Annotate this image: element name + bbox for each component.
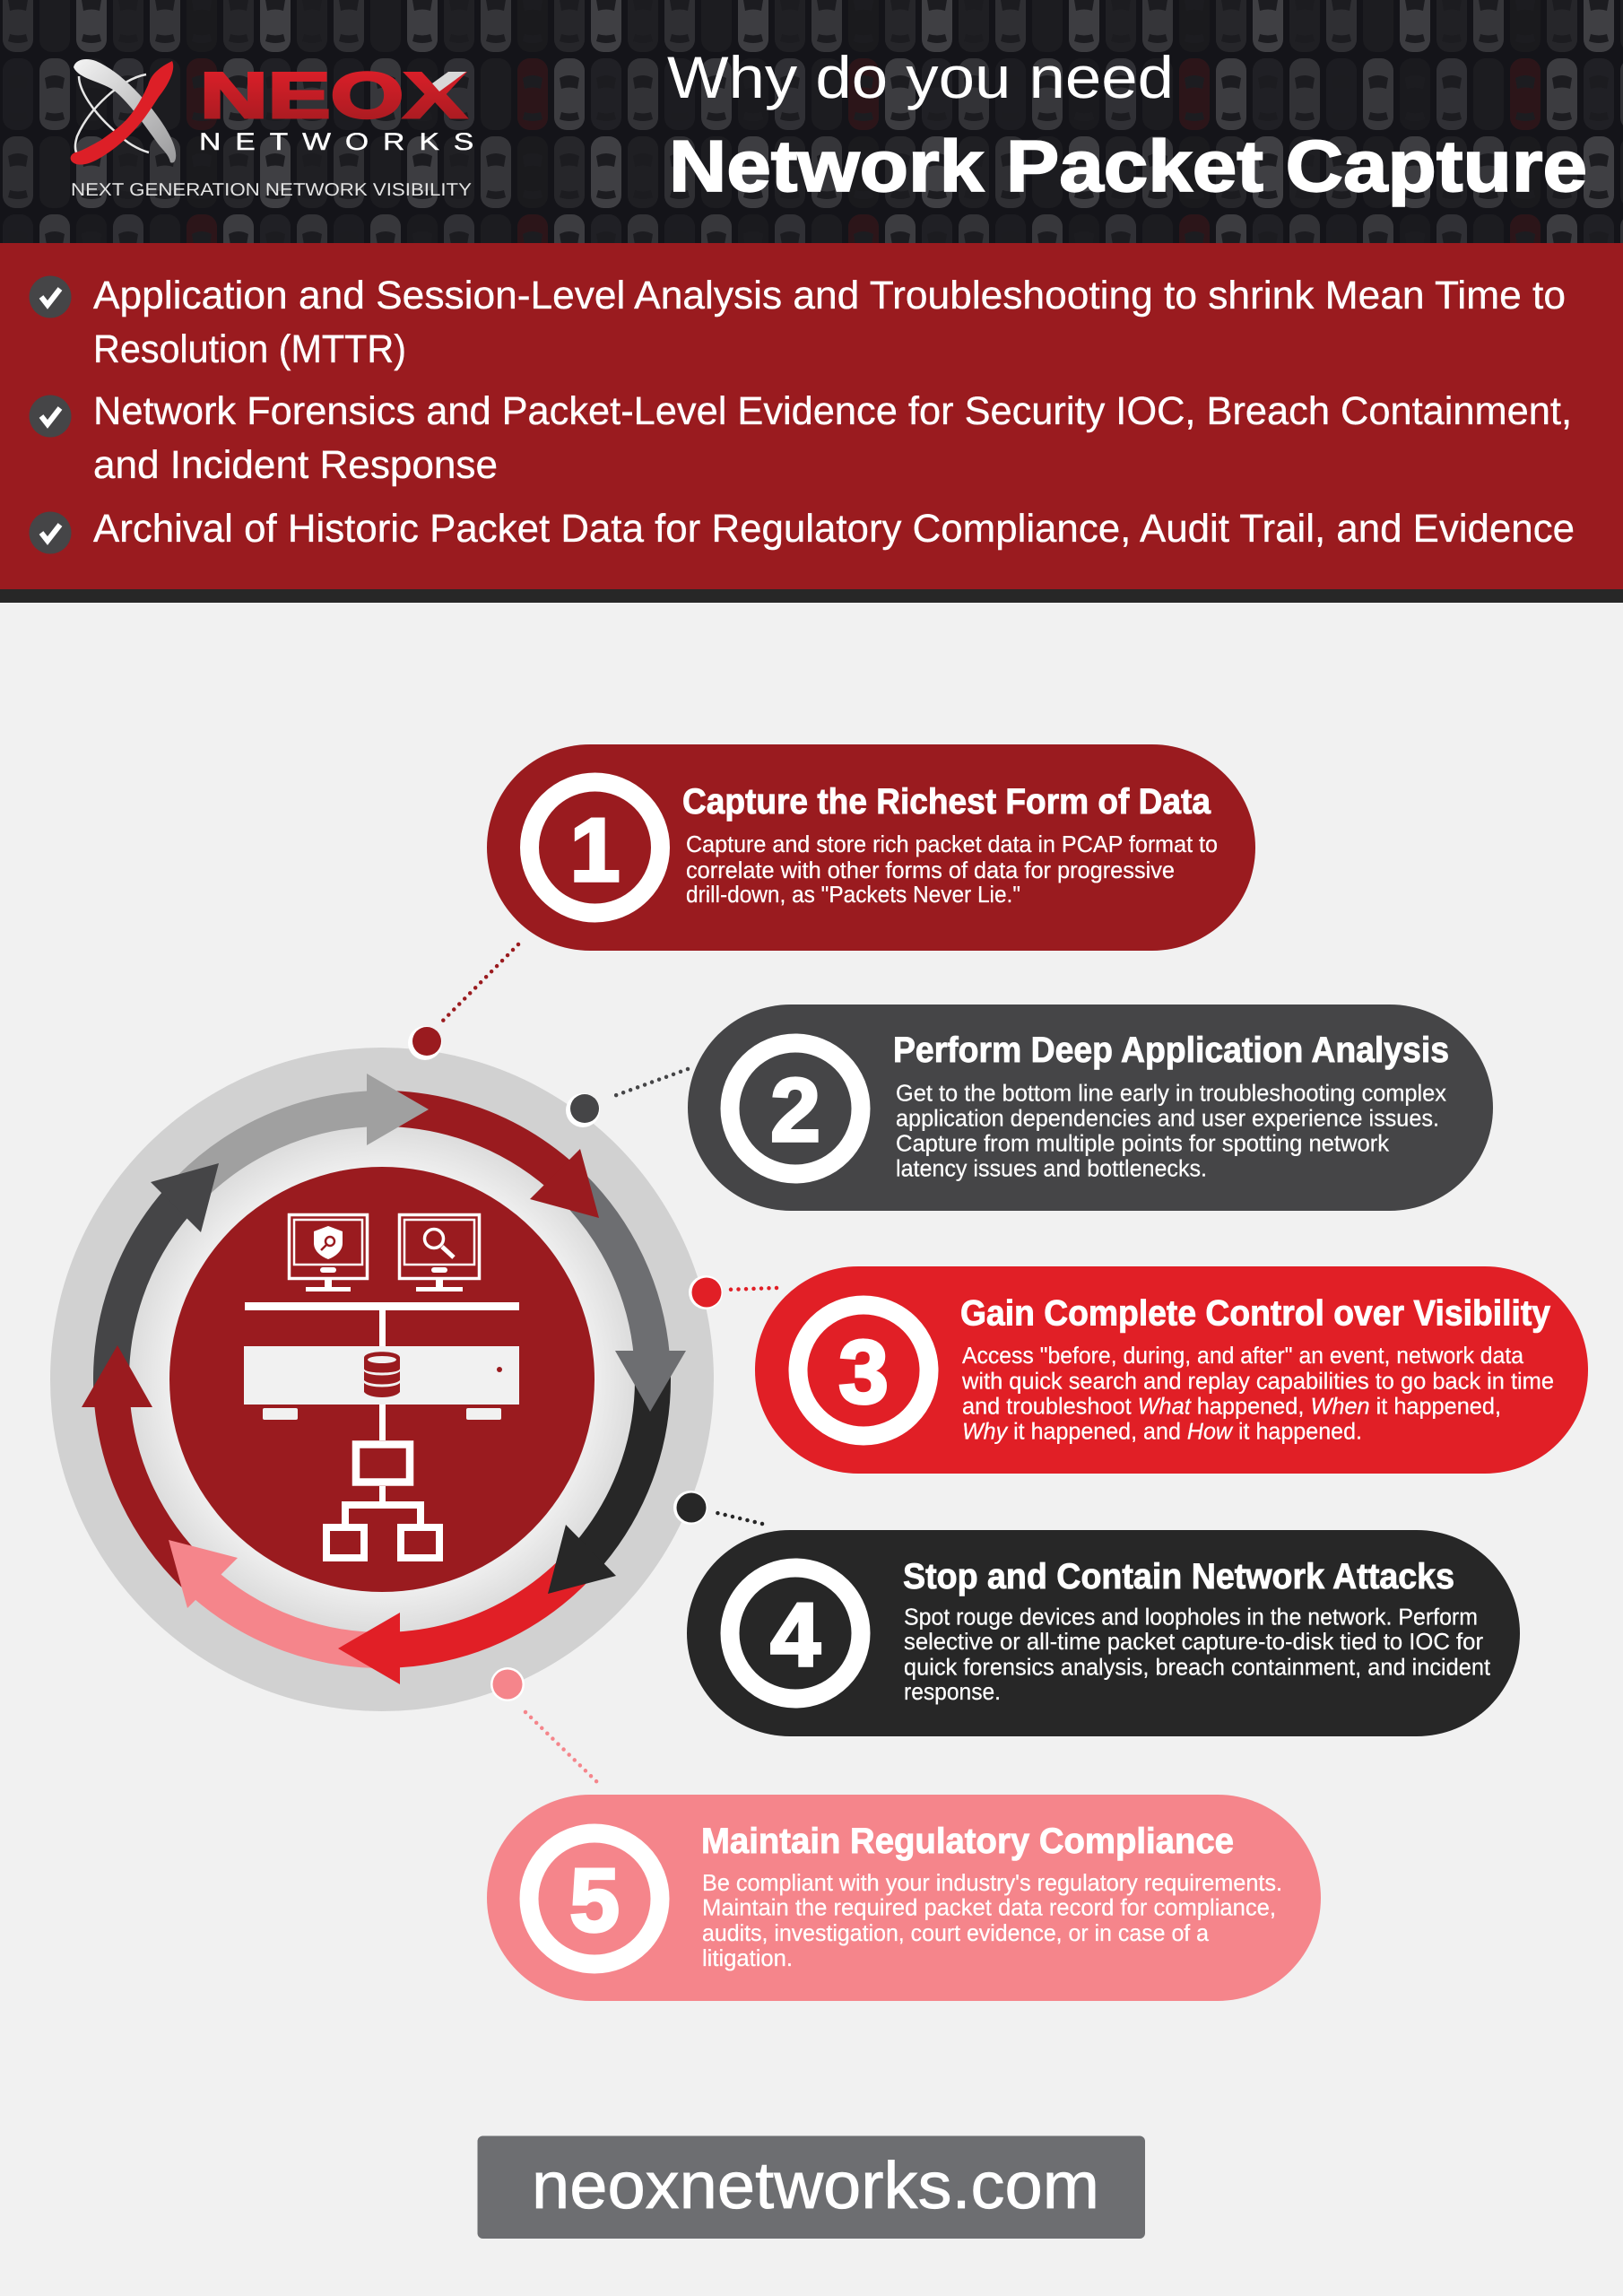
step 5 number badge: 5 bbox=[569, 1850, 620, 1951]
logo word NETWORKS: NETWORKS bbox=[199, 128, 473, 155]
step 2 body: Get to the bottom line early in troubleshooting complex bbox=[896, 1080, 1446, 1107]
bullet 3: Archival of Historic Packet Data for Regulatory Compliance, Audit Trail, and Evidence bbox=[93, 507, 1575, 551]
panel: step 5 bbox=[487, 1795, 1321, 2001]
bullet 1: Application and Session-Level Analysis and Troubleshooting to shrink Mean Time to bbox=[93, 274, 1566, 317]
footer website badge bbox=[477, 2136, 1145, 2239]
title line 2: Network Packet Capture bbox=[669, 126, 1587, 207]
bullet 2: and Incident Response bbox=[93, 443, 498, 487]
header banner bbox=[0, 0, 1623, 243]
connector dots and lines bbox=[408, 944, 777, 1784]
network bus line bbox=[245, 1302, 519, 1440]
step 5 body: Be compliant with your industry's regulatory requirements. bbox=[702, 1869, 1282, 1896]
step 2 number badge: 2 bbox=[770, 1060, 820, 1161]
step 1 body: drill-down, as "Packets Never Lie." bbox=[686, 881, 1020, 908]
bullet 2: Network Forensics and Packet-Level Evidence for Security IOC, Breach Containment, bbox=[93, 389, 1572, 433]
step 1 heading: Capture the Richest Form of Data bbox=[682, 782, 1211, 822]
step 4 heading: Stop and Contain Network Attacks bbox=[903, 1557, 1454, 1596]
step 2 number badge bbox=[730, 1043, 861, 1174]
step 3 body: Why it happened, and How it happened. bbox=[962, 1417, 1362, 1444]
panel: benefits list bbox=[0, 243, 1623, 603]
step 3 number badge bbox=[798, 1305, 929, 1436]
step 1 number badge: 1 bbox=[570, 800, 620, 900]
step 3 number badge: 3 bbox=[838, 1322, 889, 1422]
logo wordmark NEOX: NEOX bbox=[200, 60, 466, 132]
step 2 body: Capture from multiple points for spotting network bbox=[896, 1130, 1390, 1157]
step 4 body: selective or all-time packet capture-to-disk tied to IOC for bbox=[904, 1628, 1483, 1655]
panel: step 2 bbox=[688, 1004, 1493, 1211]
step 3 body bbox=[961, 1342, 1554, 1444]
icon: network hierarchy bbox=[326, 1444, 439, 1558]
icon: monitor with shield bbox=[289, 1214, 368, 1292]
step 5 body: litigation. bbox=[702, 1944, 793, 1971]
logo orbit mark bbox=[71, 59, 176, 165]
step 5 body: audits, investigation, court evidence, or in case of a bbox=[702, 1919, 1210, 1946]
step 4 number badge: 4 bbox=[770, 1585, 820, 1685]
bullet 1 bbox=[29, 274, 1566, 371]
arrow heads bbox=[82, 1074, 686, 1684]
step 2 heading: Perform Deep Application Analysis bbox=[893, 1031, 1449, 1070]
step 4 body: Spot rouge devices and loopholes in the network. Perform bbox=[904, 1604, 1478, 1631]
step 1 number badge bbox=[529, 782, 660, 913]
step 5 heading: Maintain Regulatory Compliance bbox=[701, 1822, 1234, 1861]
panel: step 1 bbox=[487, 744, 1255, 951]
step 5 number badge bbox=[529, 1833, 660, 1964]
logo tagline: NEXT GENERATION NETWORK VISIBILITY bbox=[71, 180, 472, 200]
step 2 body: application dependencies and user experience issues. bbox=[896, 1105, 1439, 1132]
step 1 body: Capture and store rich packet data in PCAP format to bbox=[686, 831, 1218, 857]
step 5 body bbox=[702, 1869, 1282, 1971]
logo bbox=[71, 59, 473, 200]
step 1 body: correlate with other forms of data for progressive bbox=[686, 857, 1175, 883]
arrow bodies bbox=[0, 996, 765, 1762]
step 2 body: latency issues and bottlenecks. bbox=[896, 1155, 1207, 1182]
title line 1: Why do you need bbox=[667, 44, 1174, 110]
step 4 body bbox=[904, 1604, 1491, 1705]
step 2 body bbox=[896, 1080, 1446, 1182]
panel: step 3 bbox=[755, 1266, 1588, 1474]
step 3 body: Access "before, during, and after" an event, network data bbox=[962, 1342, 1524, 1369]
panel: step 4 bbox=[687, 1530, 1520, 1736]
outer ring bbox=[50, 1048, 714, 1711]
capture appliance bbox=[244, 1346, 519, 1420]
footer website badge: neoxnetworks.com bbox=[532, 2148, 1099, 2222]
bullet 2 bbox=[29, 389, 1572, 487]
step 3 body: and troubleshoot What happened, When it happened, bbox=[962, 1392, 1501, 1419]
icon: database bbox=[364, 1352, 400, 1397]
step 1 body bbox=[686, 831, 1218, 908]
step 4 number badge bbox=[730, 1568, 861, 1699]
bullet 1: Resolution (MTTR) bbox=[93, 327, 406, 371]
cycle diagram bbox=[0, 944, 777, 1784]
icon: monitor with magnifier bbox=[400, 1214, 479, 1292]
step 3 body: with quick search and replay capabilities to go back in time bbox=[961, 1367, 1554, 1394]
step 5 body: Maintain the required packet data record for compliance, bbox=[702, 1894, 1276, 1921]
step 3 heading: Gain Complete Control over Visibility bbox=[960, 1293, 1551, 1333]
step 4 body: response. bbox=[904, 1678, 1001, 1705]
step 4 body: quick forensics analysis, breach containment, and incident bbox=[904, 1654, 1491, 1681]
logo wordmark NEOX bbox=[200, 60, 466, 132]
center circle bbox=[169, 1167, 595, 1592]
